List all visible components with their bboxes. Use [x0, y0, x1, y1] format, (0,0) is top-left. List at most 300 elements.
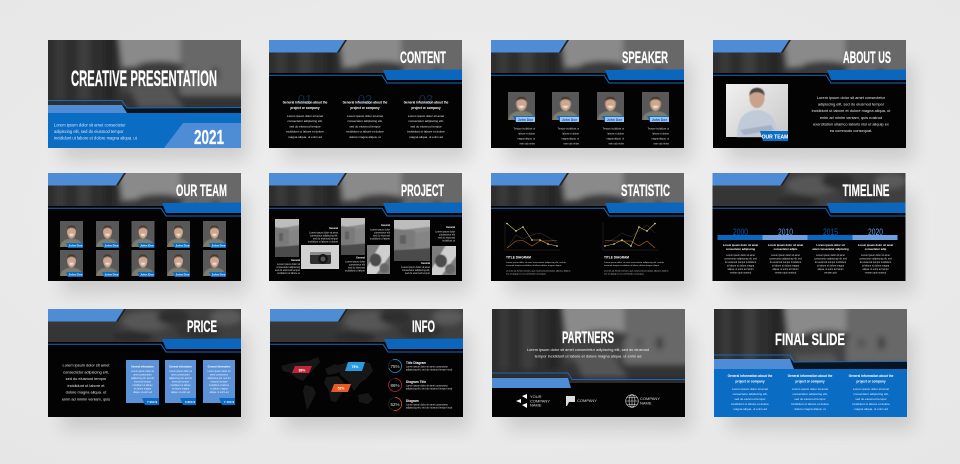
speaker 2: magna aliqua. ut: [561, 138, 579, 140]
about text: enim ad minim veniam, quis nostrud: [820, 115, 882, 120]
speaker 2: John Doe: [562, 118, 577, 122]
slide: timeline: [702, 173, 906, 281]
timeline bar: [718, 235, 898, 240]
column 3: Lorem ipsum dolor sit amet: [408, 114, 444, 118]
speaker 3: John Doe: [607, 118, 622, 122]
project note 2: consectetur adipiscing: [276, 266, 301, 269]
timeline years: 2010: [778, 227, 793, 238]
timeline column 2000: consectetur adipiscing: [726, 247, 755, 251]
timeline column 2020: do eiusmod tempor incididunt: [860, 261, 891, 264]
team portrait: [726, 84, 788, 141]
gauge text 2: adipiscing elit, sed do eiusmod tempor incid: [406, 388, 453, 390]
project note 2: incididunt ut labore et: [277, 272, 300, 275]
price card 2: Lorem ipsum dolor sit: [169, 370, 192, 373]
final column 2: project or company: [795, 380, 825, 384]
final column 1: Lorem ipsum dolor sit amet: [732, 387, 768, 391]
project note 5: General: [446, 226, 455, 229]
price intro text: sed do eiusmod tempor: [66, 376, 107, 381]
gauge text 1: adipiscing elit, sed do eiusmod tempor incid: [406, 368, 453, 372]
price card 1: incididunt ut labore: [132, 384, 153, 387]
project note 5: Lorem ipsum dolor: [435, 230, 455, 234]
timeline column 2015: do eiusmod tempor incididunt: [815, 261, 846, 264]
price card 1: adipiscing elit, sed do: [131, 377, 155, 380]
speaker 2: labore et dolore: [562, 132, 580, 136]
timeline years: [733, 227, 883, 238]
column numbers: 01: [298, 92, 312, 107]
cover intro text: Lorem ipsum dolor sit amet consectetur: [54, 122, 126, 128]
price card 3: et dolore magna: [210, 388, 228, 390]
gauge text 1: Lorem ipsum dolor sit amet consectetur: [406, 366, 448, 368]
timeline years: 2000: [733, 227, 748, 238]
timeline column 2000: Lorem ipsum dolor sit amet: [723, 243, 758, 247]
timeline column 2010: veniam quis nostrud: [775, 272, 797, 274]
price card 1: General information: [131, 366, 154, 368]
timeline years: 2020: [868, 227, 883, 238]
price card 1: 7 900 $: [147, 400, 157, 404]
team row 2: John Doe: [68, 273, 83, 277]
speaker 3: enim ad minim: [608, 142, 624, 146]
column 1: consectetur adipiscing elit,: [287, 119, 323, 123]
slide: our team: [48, 173, 241, 281]
partner logo 1: YOUR: [530, 394, 542, 399]
project note 2: [275, 259, 301, 275]
gauge 88%: [388, 378, 402, 392]
diagram caption 2: Lorem ipsum dolor sit amet consectetur adipiscing elit, sed do: [604, 261, 665, 264]
speaker 4: John Doe: [652, 118, 667, 122]
team row 2: John Doe: [104, 273, 119, 277]
gauge 75%: 75%: [390, 364, 400, 369]
partner logo 3: NAME: [640, 400, 652, 406]
timeline column 2020: veniam quis nostrud: [865, 272, 887, 274]
diagram caption 2: nisi ut aliquip ex ea commodo consequat.: [604, 272, 645, 275]
timeline column 2000: do eiusmod tempor incididunt: [725, 261, 756, 264]
speaker 2: [552, 92, 579, 144]
accent lines: [714, 355, 907, 369]
project note 5: consectetur elit: [439, 234, 455, 236]
price card 3: General information: [208, 366, 231, 368]
column 3: magna aliqua. ut enim ad: [409, 135, 443, 139]
final column 1: [728, 374, 773, 411]
world map: [281, 357, 373, 410]
diagram caption 1: TITLE DIAGRAM: [506, 256, 531, 260]
heading: PROJECT: [401, 182, 444, 200]
diagram caption 2: ut enim ad minim veniam, quis nostrud exercitation ullamco laboris: [604, 269, 669, 272]
final column 3: consectetur adipiscing elit,: [853, 392, 889, 396]
partner logo 1: NAME: [530, 403, 542, 408]
project note 4: Lorem ipsum dolor: [345, 260, 365, 264]
project note 6: consectetur adipiscing elit,: [402, 269, 430, 272]
column 2: General information about the: [343, 100, 388, 104]
column 3: General information about the: [404, 100, 449, 104]
price card 1: eiusmod tempor: [134, 380, 151, 384]
project note 1: consectetur adipiscing elit,: [310, 234, 338, 238]
timeline column 2020: consectetur adipiscing elit, sed: [859, 258, 892, 260]
speaker 1: [508, 92, 535, 144]
map label 88%: [292, 366, 312, 373]
column 3: [404, 100, 449, 139]
timeline column 2020: consectetur adip: [865, 247, 887, 251]
speaker 4: labore et dolore: [652, 132, 670, 136]
light blue band: [492, 378, 571, 388]
price card 3: incididunt ut labore: [209, 384, 230, 387]
speaker 3: magna aliqua. ut: [606, 138, 624, 140]
timeline column 2020: [858, 243, 893, 274]
speaker 1: Tempor incididunt ut: [514, 128, 535, 130]
price intro text: enim ad minim veniam, quis: [62, 396, 110, 402]
line chart 1: [505, 222, 560, 250]
speaker 1: magna aliqua. ut: [517, 138, 535, 140]
speaker 4: enim ad minim: [653, 142, 669, 146]
price card 3: 7 100 $: [224, 400, 234, 404]
column 2: incididunt ut labore et dolore: [346, 130, 384, 134]
project note 3: consectetur elit: [374, 232, 390, 234]
line chart 2: [603, 222, 658, 250]
heading: STATISTIC: [621, 182, 670, 200]
final column 3: sed do eiusmod tempor: [855, 397, 887, 401]
team row 1: John Doe: [175, 244, 190, 248]
gauge text 1: Title Diagram: [406, 361, 426, 365]
timeline column 2015: amet consectetur adipiscing: [812, 247, 849, 251]
project note 1: Lorem ipsum dolor sit amet: [309, 232, 338, 234]
slide: partners: [482, 299, 696, 427]
timeline column 2015: veniam quis: [824, 272, 838, 274]
column 2: sed do eiusmod tempor: [349, 124, 381, 128]
project note 5: incididunt ut: [442, 240, 455, 242]
timeline column 2010: aliqua. ut enim ad minim: [773, 268, 798, 271]
timeline column 2010: ut labore et dolore magna: [772, 264, 800, 268]
price card 1: [126, 360, 159, 405]
heading: ABOUT US: [843, 49, 891, 67]
price card 3: [203, 360, 235, 405]
price card 1: et dolore magna: [134, 388, 152, 390]
speaker 3: Tempor incididunt ut: [603, 128, 624, 130]
price card 2: [165, 360, 196, 405]
title: CREATIVE PRESENTATION: [71, 66, 217, 91]
diagram caption 2: eiusmod tempor incididunt ut labore dolore magna aliqua.: [604, 264, 660, 267]
final column 3: Lorem ipsum dolor sit amet: [853, 387, 889, 391]
project note 6: General: [421, 262, 430, 265]
speaker 3: labore et dolore: [607, 132, 625, 136]
final column 3: magna aliqua. ut enim ad: [854, 407, 888, 411]
price card 2: et dolore magna: [172, 388, 190, 390]
heading: INFO: [412, 318, 435, 336]
timeline column 2015: Lorem ipsum dolor sit amet: [816, 254, 845, 257]
heading: CONTENT: [400, 49, 446, 67]
street photo 1: [275, 219, 299, 257]
project note 4: sed do eiusmod: [348, 266, 366, 270]
gauge 52%: [388, 397, 402, 410]
timeline column 2020: Lorem ipsum dolor sit amet: [861, 254, 890, 257]
timeline column 2015: ut labore et dolore magna: [817, 264, 845, 268]
project note 1: incididunt ut labore et dolore: [308, 240, 339, 244]
final column 1: General information about the: [728, 374, 773, 378]
map label 75%: [345, 362, 365, 371]
price card 3: amet consectetur: [210, 374, 228, 376]
timeline column 2010: consectetur adipiscing elit, sed: [769, 258, 802, 260]
timeline column 2020: ut labore et dolore magna: [862, 264, 890, 268]
column 1: project or company: [290, 106, 320, 110]
slide: statistic: [481, 163, 695, 291]
diagram caption 2: [604, 256, 669, 275]
map label 75%: 75%: [352, 365, 358, 369]
speaker 3: [597, 92, 624, 144]
final column 1: consectetur adipiscing elit,: [732, 392, 768, 396]
project note 4: [345, 256, 366, 272]
column 1: General information about the: [283, 100, 328, 104]
column numbers: 03: [419, 92, 433, 107]
price card 1: amet consectetur: [133, 374, 152, 376]
speaker 1: enim ad minim: [519, 142, 535, 146]
column 2: dolore magna aliqua. ut: [349, 135, 381, 139]
gauge text 2: Lorem ipsum dolor sit amet consectetur: [406, 384, 448, 388]
timeline column 2000: aliqua. ut enim ad minim: [728, 268, 753, 271]
timeline column 2000: [723, 243, 758, 274]
final column 3: [849, 374, 894, 411]
speaker 2: enim ad minim: [563, 142, 579, 146]
column 2: project or company: [350, 106, 380, 110]
timeline column 2010: Lorem ipsum dolor sit amet: [768, 243, 803, 247]
price card 3: eiusmod tempor: [210, 380, 228, 384]
timeline column 2020: Lorem ipsum dolor sit amet: [858, 243, 893, 247]
project note 3: General: [381, 224, 390, 227]
slide: content: [269, 40, 462, 148]
slide: final slide: [704, 299, 918, 427]
gauge 75%: [387, 358, 403, 374]
hand photo 2: [431, 245, 457, 276]
partner logo 2: COMPANY: [577, 398, 597, 403]
about text: ea commodo consequat.: [830, 128, 872, 133]
final column 2: Lorem ipsum dolor sit amet: [792, 387, 828, 391]
diagram caption 1: ut enim ad minim veniam, quis nostrud exercitation ullamco laboris: [506, 269, 571, 272]
column 1: [283, 100, 328, 139]
slide: info: [260, 309, 464, 417]
timeline column 2000: consectetur adipiscing elit, sed: [724, 258, 757, 260]
price card 2: aliqua. ut enim ad: [171, 391, 191, 394]
price intro text: Lorem ipsum dolor sit amet: [63, 362, 110, 368]
map label 88%: 88%: [299, 368, 305, 372]
accent lines: [492, 373, 685, 380]
map label 52%: 52%: [338, 386, 344, 390]
about text: exercitation ullamco laboris nisi ut aliquip ex: [813, 121, 889, 126]
project note 2: sed do eiusmod tempor: [275, 269, 300, 272]
project note 5: sed do eiusmod: [438, 236, 456, 240]
timeline column 2015: [812, 243, 849, 274]
about text: incididunt ut labore et dolore magna aliqua. ut: [812, 108, 891, 113]
price card 1: aliqua. ut enim ad: [133, 391, 153, 394]
gauge 88%: 88%: [390, 383, 400, 388]
team row 1: John Doe: [104, 244, 119, 248]
timeline column 2000: ut labore et dolore magna: [727, 264, 755, 268]
speaker 4: Tempor incididunt ut: [648, 128, 669, 130]
cover intro text: incididunt ut labore et dolore magna aliqua. ut: [54, 136, 138, 140]
timeline column 2010: do eiusmod tempor incididunt: [770, 261, 801, 264]
gauge text 2: [406, 380, 453, 390]
price card 2: 5 800 $: [185, 400, 195, 404]
slide: price: [38, 309, 242, 417]
heading: FINAL SLIDE: [775, 330, 845, 349]
price card 2: General information: [169, 366, 192, 368]
gauge text 2: Diagram Title: [406, 380, 426, 384]
gauge text 3: [406, 399, 453, 410]
project note 6: [401, 262, 430, 275]
gauge text 1: [406, 361, 453, 372]
heading: PRICE: [187, 318, 217, 336]
diagram caption 2: TITLE DIAGRAM: [604, 256, 629, 260]
timeline column 2010: consectetur adipis: [774, 247, 798, 251]
heading: PARTNERS: [562, 329, 614, 347]
price card 1: Lorem ipsum dolor sit: [131, 370, 154, 373]
cover intro text: adipiscing elit, sed do eiusmod tempor: [54, 129, 124, 134]
project note 1: [308, 227, 339, 244]
final column 3: General information about the: [849, 374, 894, 378]
project note 1: General: [329, 227, 338, 230]
project note 4: incididunt ut labore: [345, 270, 366, 272]
map label 52%: [331, 384, 351, 392]
project note 2: General: [291, 259, 300, 262]
speaker 2: Tempor incididunt ut: [558, 128, 579, 130]
partner logo 1: [516, 394, 550, 408]
heading: SPEAKER: [622, 49, 668, 67]
team row 1: John Doe: [68, 244, 83, 248]
street photo 2: [341, 218, 365, 255]
partners intro: tempor incididunt ut labore et dolore magna aliqua. ut enim ad: [535, 354, 641, 359]
timeline column 2015: aliqua. ut enim ad minim: [818, 268, 843, 271]
hand photo 1: [367, 245, 390, 274]
project note 4: General: [356, 256, 365, 260]
timeline column 2015: Lorem ipsum dolor sit: [816, 243, 845, 247]
final column 1: incididunt ut labore et dolore: [731, 402, 769, 406]
slide: about us: [713, 40, 906, 148]
slide: creative presentation cover: [48, 40, 241, 148]
diagram caption 1: [506, 256, 571, 275]
final column 3: project or company: [856, 380, 886, 384]
final column 2: incididunt ut labore et dolore: [791, 402, 829, 406]
project note 3: Lorem ipsum dolor: [370, 228, 390, 232]
final column 2: [788, 374, 833, 411]
speaker 1: labore et dolore: [518, 132, 536, 136]
column 2: consectetur adipiscing elit,: [347, 119, 383, 123]
timeline column 2010: [768, 243, 803, 274]
slide: project: [269, 173, 462, 281]
project note 2: Lorem ipsum dolor sit: [277, 263, 300, 266]
final column 2: consectetur adipiscing elit,: [792, 392, 828, 396]
price card 3: aliqua. ut enim ad: [210, 391, 229, 394]
column numbers: [298, 95, 433, 104]
price card 3: adipiscing elit, sed do: [208, 377, 231, 380]
timeline years: 2015: [823, 227, 838, 238]
slide: speaker: [491, 40, 684, 148]
team row 2: John Doe: [211, 273, 226, 277]
price card 3: Lorem ipsum dolor sit: [208, 370, 231, 373]
column 1: sed do eiusmod tempor: [289, 124, 321, 128]
final column 1: sed do eiusmod tempor: [734, 397, 766, 401]
team row 1: John Doe: [211, 244, 226, 248]
column 3: project or company: [411, 106, 441, 110]
column 3: sed do eiusmod tempor: [410, 124, 442, 128]
team portrait: OUR TEAM: [762, 134, 788, 140]
project note 6: Lorem ipsum dolor sit amet: [401, 266, 430, 269]
cover blue footer: [48, 113, 241, 148]
heading: OUR TEAM: [176, 181, 227, 200]
diagram caption 1: eiusmod tempor incididunt ut labore dolore magna aliqua.: [506, 264, 562, 267]
diagram caption 1: nisi ut aliquip ex ea commodo consequat.: [506, 272, 547, 275]
team row 1: John Doe: [140, 244, 154, 248]
year panel: [164, 123, 241, 148]
project note 5: [435, 226, 456, 242]
column 1: magna aliqua. ut enim ad: [288, 135, 322, 139]
timeline column 2015: consectetur adipiscing elit, sed: [814, 258, 847, 260]
team row 2: John Doe: [175, 273, 190, 277]
about text: Lorem ipsum dolor sit amet consectetur: [817, 95, 886, 100]
team row 2: [59, 249, 227, 277]
price card 2: incididunt ut labore: [170, 384, 191, 387]
final column 1: project or company: [735, 380, 765, 384]
camera photo: [301, 245, 339, 269]
price card 2: eiusmod tempor: [172, 380, 189, 384]
price intro text: incididunt ut labore et: [68, 383, 105, 388]
price card 2: amet consectetur: [171, 374, 190, 376]
partners intro: Lorem ipsum dolor sit amet consectetur adipiscing elit, sed do eiusmod: [527, 347, 649, 352]
final column 2: General information about the: [788, 374, 833, 378]
final column 3: incididunt ut labore et dolore: [852, 402, 890, 406]
column 2: [343, 100, 388, 139]
project note 3: incididunt ut labore: [370, 238, 391, 240]
price intro text: consectetur adipiscing elit,: [63, 369, 109, 374]
gauge text 3: adipiscing elit, sed do eiusmod tempor incid: [406, 406, 453, 410]
slide shadows: [62, 62, 913, 429]
partner logo 1: COMPANY: [530, 398, 550, 403]
project note 4: consectetur elit: [349, 264, 365, 266]
project note 3: sed do eiusmod: [373, 234, 391, 238]
heading: TIMELINE: [842, 182, 890, 200]
price card 2: adipiscing elit, sed do: [169, 377, 193, 380]
column 3: consectetur adipiscing elit,: [408, 119, 444, 123]
project note 6: sed do eiusmod tempor: [405, 272, 430, 275]
timeline column 2000: Lorem ipsum dolor sit amet: [726, 254, 755, 257]
blue panel: [714, 369, 907, 417]
partner logo 3: [626, 395, 660, 407]
speaker 4: magna aliqua. ut: [651, 138, 669, 140]
diagram caption 1: Lorem ipsum dolor sit amet consectetur adipiscing elit, sed do: [506, 261, 567, 264]
partner logo 3: COMPANY: [640, 396, 660, 401]
cover light blue band: [48, 105, 127, 113]
project note 3: [370, 224, 391, 240]
light blue band: [714, 359, 794, 369]
black footer: [492, 383, 685, 417]
year: 2021: [194, 127, 224, 149]
final column 2: sed do eiusmod tempor: [794, 397, 826, 401]
column 1: Lorem ipsum dolor sit amet: [287, 114, 323, 118]
column 2: Lorem ipsum dolor sit amet: [347, 114, 383, 118]
about text: adipiscing elit, sed do eiusmod tempor: [818, 102, 885, 107]
partner logo 2: [566, 396, 597, 406]
final column 2: dolore magna aliqua. ut: [794, 407, 826, 411]
timeline column 2000: veniam quis nostrud: [730, 272, 752, 274]
final column 1: magna aliqua. ut enim ad: [733, 407, 767, 411]
timeline column 2010: Lorem ipsum dolor sit amet: [771, 254, 800, 257]
gauge 52%: 52%: [390, 402, 400, 407]
cover accent lines: [48, 100, 241, 113]
street photo 3: [394, 220, 430, 261]
column numbers: 02: [358, 92, 372, 107]
gauge text 3: Diagram: [406, 399, 419, 403]
speaker 1: John Doe: [518, 118, 533, 122]
project note 1: sed do eiusmod tempor: [313, 238, 338, 240]
column 1: incididunt ut labore et dolore: [286, 130, 324, 134]
column 3: incididunt ut labore et dolore: [407, 130, 445, 134]
timeline column 2020: aliqua. ut enim ad minim: [863, 268, 888, 271]
price intro text: dolore magna aliqua. ut: [66, 390, 107, 395]
